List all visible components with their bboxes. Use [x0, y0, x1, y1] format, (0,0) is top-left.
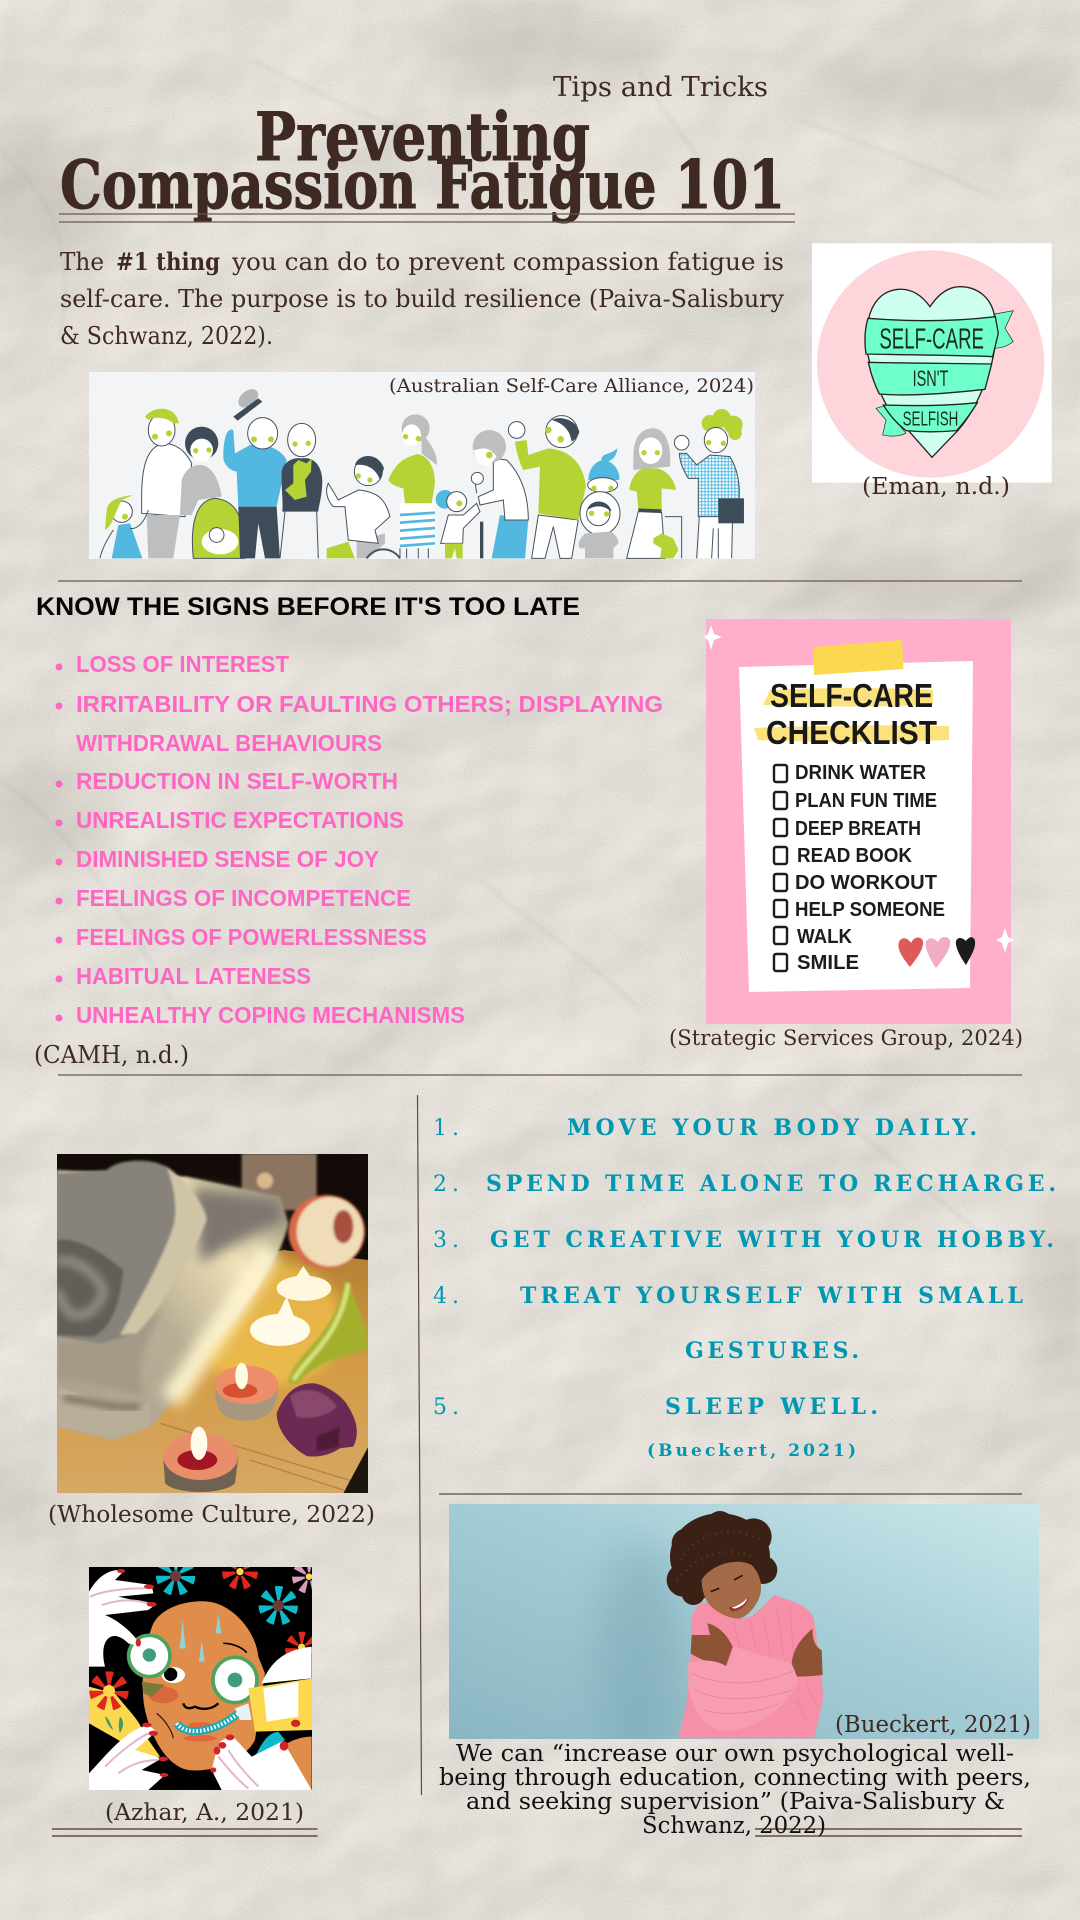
list: signs of compassion fatigue: HABITUAL LATENESS	[76, 963, 311, 989]
citation: CAMH: (CAMH, n.d.)	[34, 1041, 189, 1069]
image: self-care checklist poster: CHECKLIST	[766, 714, 937, 751]
image: self-care checklist poster: READ BOOK	[797, 845, 913, 867]
image: woman hugging herself	[449, 1504, 1039, 1739]
citation: Australian Self-Care Alliance: (Australian Self-Care Alliance, 2024)	[389, 375, 754, 397]
list: signs of compassion fatigue: FEELINGS OF POWERLESSNESS	[76, 924, 427, 950]
vertical divider	[418, 1095, 422, 1795]
image: illustrated community group	[89, 372, 755, 559]
image: self-care isn't selfish heart logo	[812, 243, 1052, 483]
list: signs of compassion fatigue: UNREALISTIC EXPECTATIONS	[76, 807, 404, 833]
intro paragraph: The	[60, 248, 104, 276]
intro paragraph: & Schwanz, 2022).	[60, 322, 273, 350]
intro paragraph: you can do to prevent compassion fatigue is	[231, 248, 784, 276]
image: self-care checklist poster: SELF-CARE	[770, 677, 933, 714]
list: five self-care tips: GET CREATIVE WITH YOUR HOBBY.	[490, 1227, 1054, 1253]
list: five self-care tips: TREAT YOURSELF WITH SMALL	[520, 1283, 1023, 1309]
list: five self-care tips: 5.	[433, 1395, 459, 1420]
divider	[58, 580, 1022, 582]
intro paragraph	[60, 247, 784, 350]
list: five self-care tips: SLEEP WELL.	[665, 1394, 878, 1420]
list: signs of compassion fatigue: DIMINISHED SENSE OF JOY	[76, 846, 379, 872]
list: five self-care tips: GESTURES.	[685, 1338, 859, 1364]
list: five self-care tips: 4.	[433, 1284, 459, 1309]
citation: Bueckert tips: (Bueckert, 2021)	[647, 1441, 856, 1461]
citation: Azhar: (Azhar, A., 2021)	[105, 1800, 304, 1826]
quote: Schwanz, 2022)	[642, 1813, 826, 1839]
list: five self-care tips	[433, 1115, 1056, 1420]
list: five self-care tips: 3.	[433, 1228, 459, 1253]
image: self-care checklist poster: PLAN FUN TIME	[795, 790, 937, 812]
title: Preventing	[255, 98, 590, 176]
image: self-care isn't selfish heart logo: ISN'T	[913, 366, 948, 391]
title	[59, 98, 795, 224]
list: signs of compassion fatigue: UNHEALTHY COPING MECHANISMS	[76, 1002, 465, 1028]
image: self-care isn't selfish heart logo: SELFISH	[903, 407, 958, 430]
image: self-care checklist poster: DO WORKOUT	[795, 872, 937, 894]
list: five self-care tips: 1.	[433, 1116, 459, 1141]
title: Compassion Fatigue 101	[60, 146, 785, 224]
bottom double rule right	[755, 1829, 1022, 1836]
image: self-care checklist poster: HELP SOMEONE	[795, 899, 945, 921]
citation: Bueckert photo: (Bueckert, 2021)	[835, 1712, 1031, 1738]
image: self-care isn't selfish heart logo: SELF-CARE	[879, 323, 984, 355]
citation: Wholesome Culture: (Wholesome Culture, 2022)	[48, 1502, 375, 1528]
list: signs of compassion fatigue	[56, 651, 663, 1028]
list: signs of compassion fatigue: REDUCTION IN SELF-WORTH	[76, 768, 398, 794]
list: five self-care tips: MOVE YOUR BODY DAILY.	[567, 1115, 977, 1141]
heading: know the signs: KNOW THE SIGNS BEFORE IT'S TOO LATE	[36, 593, 580, 621]
list: signs of compassion fatigue: FEELINGS OF INCOMPETENCE	[76, 885, 411, 911]
image: self-care checklist poster: WALK	[797, 926, 853, 948]
image: self-care checklist poster	[704, 619, 1014, 1024]
intro paragraph: self-care. The purpose is to build resilience (Paiva-Salisbury	[60, 285, 784, 313]
divider	[58, 1074, 1022, 1076]
intro paragraph: #1 thing	[116, 247, 220, 276]
divider	[439, 1493, 1022, 1495]
list: signs of compassion fatigue: WITHDRAWAL BEHAVIOURS	[76, 730, 382, 756]
image: towels and candles	[57, 1153, 368, 1493]
subtitle: Tips and Tricks: Tips and Tricks	[553, 72, 768, 103]
bottom double rule left	[52, 1829, 318, 1836]
list: signs of compassion fatigue: LOSS OF INTEREST	[76, 651, 289, 677]
image: self-care checklist poster: SMILE	[797, 952, 859, 974]
list: five self-care tips: 2.	[433, 1172, 459, 1197]
list: signs of compassion fatigue: IRRITABILITY OR FAULTING OTHERS; DISPLAYING	[76, 691, 663, 717]
list: five self-care tips: SPEND TIME ALONE TO RECHARGE.	[486, 1171, 1056, 1197]
quote: and seeking supervision” (Paiva-Salisbury &	[466, 1789, 1005, 1815]
quote	[439, 1741, 1031, 1839]
quote: We can “increase our own psychological well-	[456, 1741, 1014, 1767]
image: face mask illustration	[88, 1560, 320, 1790]
quote: being through education, connecting with peers,	[439, 1765, 1031, 1791]
citation: Eman: (Eman, n.d.)	[862, 474, 1010, 500]
citation: Strategic Services Group: (Strategic Services Group, 2024)	[669, 1026, 1023, 1050]
image: self-care checklist poster: DRINK WATER	[795, 762, 927, 784]
image: self-care checklist poster: DEEP BREATH	[795, 818, 921, 840]
